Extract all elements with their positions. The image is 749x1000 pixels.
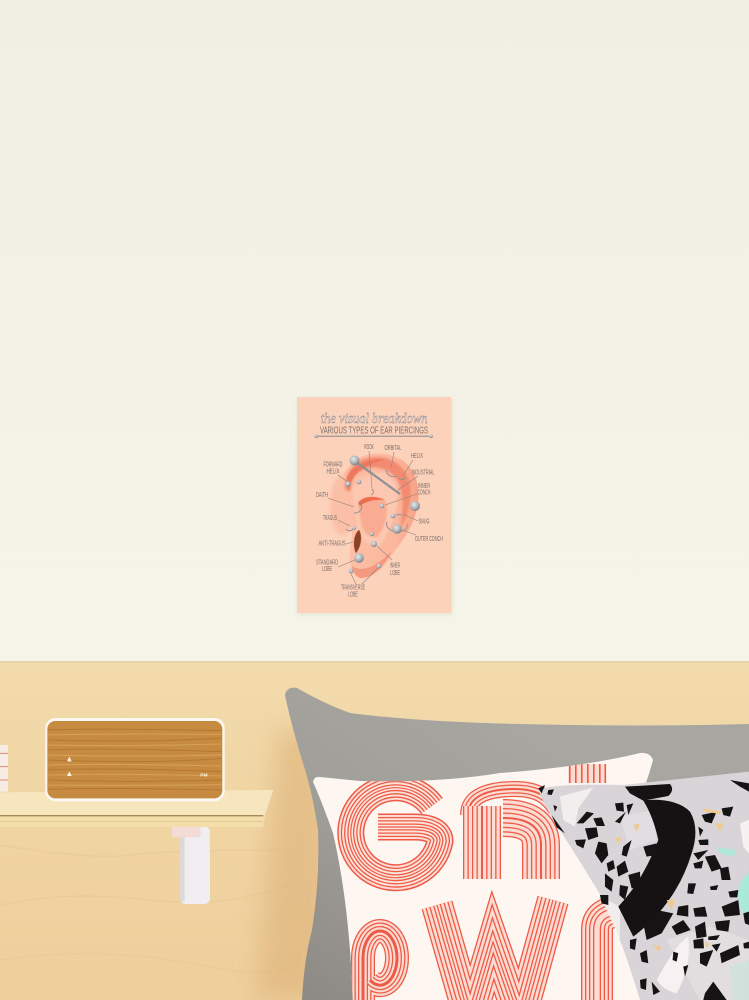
- letter R: [468, 789, 556, 879]
- label: forward helix: HELIX: [326, 466, 340, 476]
- mint shapes: [717, 847, 749, 1000]
- title barbell divider: [314, 434, 433, 438]
- poster title: script line: the visual breakdown: [320, 411, 428, 427]
- poster: ear piercings infographic: TRANSVERSE: [341, 582, 365, 592]
- piercing: forward helix: [345, 480, 361, 487]
- concha bowl: [358, 497, 387, 537]
- poster subtitle: VARIOUS TYPES OF EAR PIERCINGS: [320, 426, 428, 436]
- stacked object on shelf edge: [0, 745, 8, 792]
- wall background: [0, 0, 749, 662]
- label: orbital: ORBITAL: [384, 443, 402, 452]
- label: standard lobe: LOBE: [322, 564, 332, 573]
- grey back pillow: [285, 688, 749, 1000]
- label: outer conch: OUTER CONCH: [415, 534, 443, 543]
- label: industrial: INDUSTRIAL: [412, 468, 434, 476]
- label: inner conch: INNER: [418, 481, 430, 490]
- concha upper shadow: [358, 497, 385, 506]
- letter W: [437, 900, 553, 1000]
- piercing: orbital: [386, 470, 397, 477]
- label: inner conch: [418, 481, 430, 496]
- poster: ear piercings infographic: CONCH: [418, 488, 430, 496]
- leader lines: [328, 451, 418, 584]
- ear shape: [341, 453, 418, 578]
- label: helix: HELIX: [411, 451, 423, 460]
- poster: ear piercings infographic: ROOK: [364, 442, 374, 451]
- terrazzo base: [538, 772, 749, 1000]
- letter R, second row: [581, 899, 616, 1000]
- ear canal: [354, 530, 361, 553]
- wooden clock: [45, 718, 225, 801]
- piercing: inner conch: [380, 504, 384, 508]
- ear illustration: [330, 453, 418, 578]
- shelf board: [0, 790, 273, 827]
- pillow lettering in coral stripes: [351, 764, 645, 1000]
- piercing: inner lobe: [371, 541, 377, 547]
- poster: ear piercings infographic: [297, 397, 452, 614]
- lobe shading: [352, 551, 392, 578]
- shelf with clock and bracket: [0, 718, 273, 904]
- piercing: rook: [371, 489, 373, 495]
- large black arc: [618, 784, 695, 937]
- piercing: snug: [391, 514, 402, 518]
- piercing: outer helix ball: [410, 501, 420, 511]
- clock PM label: PM: [200, 772, 208, 778]
- black terrazzo chips: [538, 780, 749, 1000]
- pale patches: [560, 787, 749, 1000]
- label: standard lobe: [316, 558, 338, 573]
- label: snug: SNUG: [418, 516, 430, 526]
- letter O fragment: [568, 764, 606, 783]
- face fade near ear: [330, 475, 356, 535]
- label: standard lobe: STANDARD: [316, 558, 338, 566]
- piercing: anti-tragus: [370, 532, 374, 536]
- piercing: standard lobe: [354, 553, 364, 563]
- confetti chips: [615, 808, 723, 952]
- piercing: daith: [354, 502, 362, 513]
- label: inner lobe: LOBE: [390, 568, 400, 577]
- antihelix area: [352, 472, 398, 548]
- letter P: [363, 931, 397, 1000]
- label: forward helix: FORWARD: [324, 460, 342, 468]
- terrazzo pillow: [538, 772, 749, 1000]
- piercing: helix ring: [399, 477, 405, 480]
- piercing: outer conch: [387, 522, 407, 534]
- label: forward helix: [324, 460, 342, 476]
- poster: ear piercings infographic: TRAGUS: [323, 513, 337, 522]
- piercing: tragus: [346, 526, 356, 531]
- label: transverse lobe: LOBE: [348, 590, 358, 598]
- wooden wall panel: [0, 661, 749, 1000]
- piercing: transverse lobe: [349, 564, 381, 573]
- label: daith: DAITH: [316, 490, 328, 499]
- label: transverse lobe: [341, 582, 365, 598]
- label: anti-tragus: ANTI-TRAGUS: [318, 538, 346, 548]
- letter G: [351, 788, 440, 878]
- white typographic pillow: [313, 753, 700, 1000]
- bracket: [172, 827, 210, 904]
- label: inner lobe: [390, 560, 400, 577]
- piercing: industrial barbell: [350, 456, 400, 494]
- helix inner fold: [345, 457, 411, 529]
- clock alarm indicators: [67, 757, 72, 776]
- poster: ear piercings infographic: INNER: [390, 560, 400, 570]
